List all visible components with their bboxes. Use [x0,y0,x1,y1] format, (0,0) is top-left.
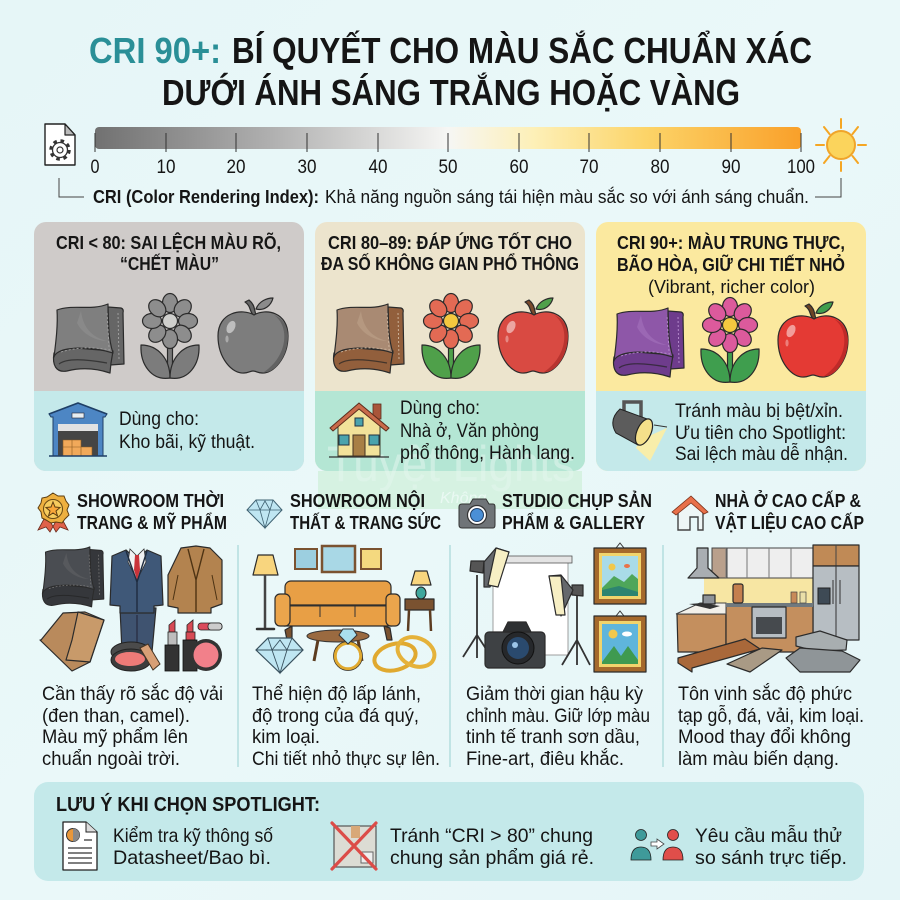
text: request samples: Yêu cầu mẫu thử [695,824,842,847]
text: fashion: chuẩn ngoài trời. [42,748,180,770]
text: fashion: (đen than, camel). [42,705,190,727]
icon: brown fabric [334,304,404,373]
heading: CRI 80 to 89: ĐA SỐ KHÔNG GIAN PHỔ THÔNG [321,253,579,274]
heading: CRI 90 plus: (Vibrant, richer color) [648,276,815,297]
title [89,29,812,113]
heading: fashion showroom: SHOWROOM THỜI [77,490,224,511]
icon: house [329,403,389,457]
icon: two people comparing [631,830,683,860]
text: premium homes: Mood thay đổi không [678,726,851,748]
text: studio: chỉnh màu. Giữ lớp màu [466,705,650,727]
heading: CRI 80 to 89: CRI 80–89: ĐÁP ỨNG TỐT CHO [328,232,572,253]
text: fashion [42,682,223,770]
CRI scale bar: 30 [298,157,316,178]
text: avoid generic CRI above 80 [390,825,594,869]
CRI scale bar: 50 [438,157,458,178]
title: DƯỚI ÁNH SÁNG TRẮNG HOẶC VÀNG [162,71,740,113]
CRI scale bar: 40 [368,157,388,178]
heading: studio [502,490,652,533]
CRI scale bar: 0 [90,157,100,178]
icon: medal [38,493,69,532]
CRI scale bar: 10 [156,157,176,178]
heading: premium homes [715,490,864,533]
CRI scale bar: 90 [722,157,740,178]
heading: CRI 80 to 89 [321,232,579,274]
section: fashion showroom [38,490,227,770]
heading: premium homes: VẬT LIỆU CAO CẤP [715,512,864,533]
CRI scale bar: 20 [226,157,246,178]
text: spotlight priority: Tránh màu bị bệt/xỉn. [675,400,843,422]
text: fashion: Màu mỹ phẩm lên [42,726,188,748]
panel: CRI 90 plus [596,222,866,471]
section: studio and gallery [459,490,652,770]
section: premium homes [672,490,864,770]
icon: purple fabric [614,308,684,377]
text: check datasheet: Kiểm tra kỹ thông số [113,825,273,847]
illustration: studio equipment and paintings [463,543,646,672]
text: interior: Chi tiết nhỏ thực sự lên. [252,748,440,770]
text: studio: Fine-art, điêu khắc. [466,747,624,770]
icon: spotlight [613,402,667,461]
text: request samples [695,824,847,869]
section: interior and jewellery showroom [247,490,441,770]
CRI scale bar: 80 [650,157,670,178]
text: fashion: Cần thấy rõ sắc độ vải [42,682,223,705]
text: avoid generic CRI above 80: chung sản phẩm giá rẻ. [390,847,594,869]
text: premium homes: Tôn vinh sắc độ phức [678,682,852,705]
icon: diamond [247,500,282,528]
text: spotlight priority [675,400,848,465]
text: check datasheet: Datasheet/Bao bì. [113,847,271,869]
panel: CRI below 80 [34,222,304,471]
text: used for homes: Dùng cho: [400,397,480,419]
watermark: Không [440,490,486,507]
heading: notes: LƯU Ý KHI CHỌN SPOTLIGHT: [56,792,320,816]
heading: studio: PHẨM & GALLERY [502,512,645,533]
icon: datasheet [63,822,97,870]
text: used for homes: Nhà ở, Văn phòng [400,420,539,442]
icon: red apple [498,298,568,373]
CRI scale bar [90,127,815,178]
text: premium homes: làm màu biến dạng. [678,748,839,770]
heading: premium homes: NHÀ Ở CAO CẤP & [715,490,861,511]
illustration: fabrics suits cosmetics [40,546,222,671]
text: used for homes: phổ thông, Hành lang. [400,442,575,464]
text: avoid generic CRI above 80: Tránh “CRI > 80” chung [390,825,593,847]
icon: grey flower [141,294,199,378]
icon: document with gear [45,124,75,165]
heading: CRI 90 plus [617,232,845,297]
heading: CRI below 80: “CHẾT MÀU” [120,253,219,274]
text: used for warehouses: Dùng cho: [119,408,199,430]
heading: interior showroom: THẤT & TRANG SỨC [290,512,441,533]
title: BÍ QUYẾT CHO MÀU SẮC CHUẨN XÁC [232,29,812,71]
CRI definition [59,178,841,207]
icon: grey apple [218,298,288,373]
text: used for homes [400,397,575,464]
text: studio [466,683,650,770]
text: spotlight priority: Sai lệch màu dễ nhận. [675,442,848,465]
icon: pink flower [701,298,759,382]
panel: CRI 80 to 89 [315,222,585,509]
heading: CRI below 80: CRI < 80: SAI LỆCH MÀU RÕ, [56,232,281,253]
CRI definition: Khả năng nguồn sáng tái hiện màu sắc so với ánh sáng chuẩn. [325,186,809,207]
heading: fashion showroom: TRANG & MỸ PHẨM [77,512,227,533]
text: interior: Thể hiện độ lấp lánh, [252,683,421,705]
heading: studio: STUDIO CHỤP SẢN [502,490,652,511]
text: interior [252,683,440,770]
text: check datasheet [113,825,273,869]
CRI scale bar: 60 [510,157,528,178]
heading: interior showroom: SHOWROOM NỘI [290,490,425,511]
text: interior: độ trong của đá quý, [252,705,419,727]
icon: crossed-out cheap box [332,823,376,869]
icon: sun [816,119,866,171]
text: used for warehouses: Kho bãi, kỹ thuật. [119,431,255,453]
text: studio: Giảm thời gian hậu kỳ [466,683,643,705]
heading: CRI 90 plus: BÃO HÒA, GIỮ CHI TIẾT NHỎ [617,254,845,275]
text: interior: kim loại. [252,726,320,748]
icon: camera [459,499,495,528]
icon: grey fabric [54,304,124,373]
heading: CRI below 80 [56,232,281,274]
heading: interior showroom [290,490,441,533]
text: request samples: so sánh trực tiếp. [695,847,847,869]
text: used for warehouses [119,408,255,453]
icon: warehouse [49,403,107,456]
CRI definition: CRI (Color Rendering Index): [93,187,319,207]
text: spotlight priority: Ưu tiên cho Spotlight: [675,422,846,444]
text: premium homes [678,682,864,770]
watermark: Tuyệt Lights [327,436,575,492]
illustration: kitchen and materials [676,545,860,672]
icon: house outline [672,496,708,530]
CRI scale bar: 100 [787,157,815,178]
panel: spotlight selection notes [34,782,864,881]
icon: orange-red flower [422,294,480,378]
heading: CRI 90 plus: CRI 90+: MÀU TRUNG THỰC, [617,232,845,253]
title: CRI 90+: [89,30,221,71]
icon: vivid red apple [778,302,848,377]
illustration: living room and jewellery [253,546,439,675]
text: premium homes: tạp gỗ, đá, vải, kim loại. [678,704,864,727]
heading: fashion showroom [77,490,227,533]
CRI scale bar: 70 [580,157,598,178]
text: studio: tinh tế tranh sơn dầu, [466,726,640,748]
